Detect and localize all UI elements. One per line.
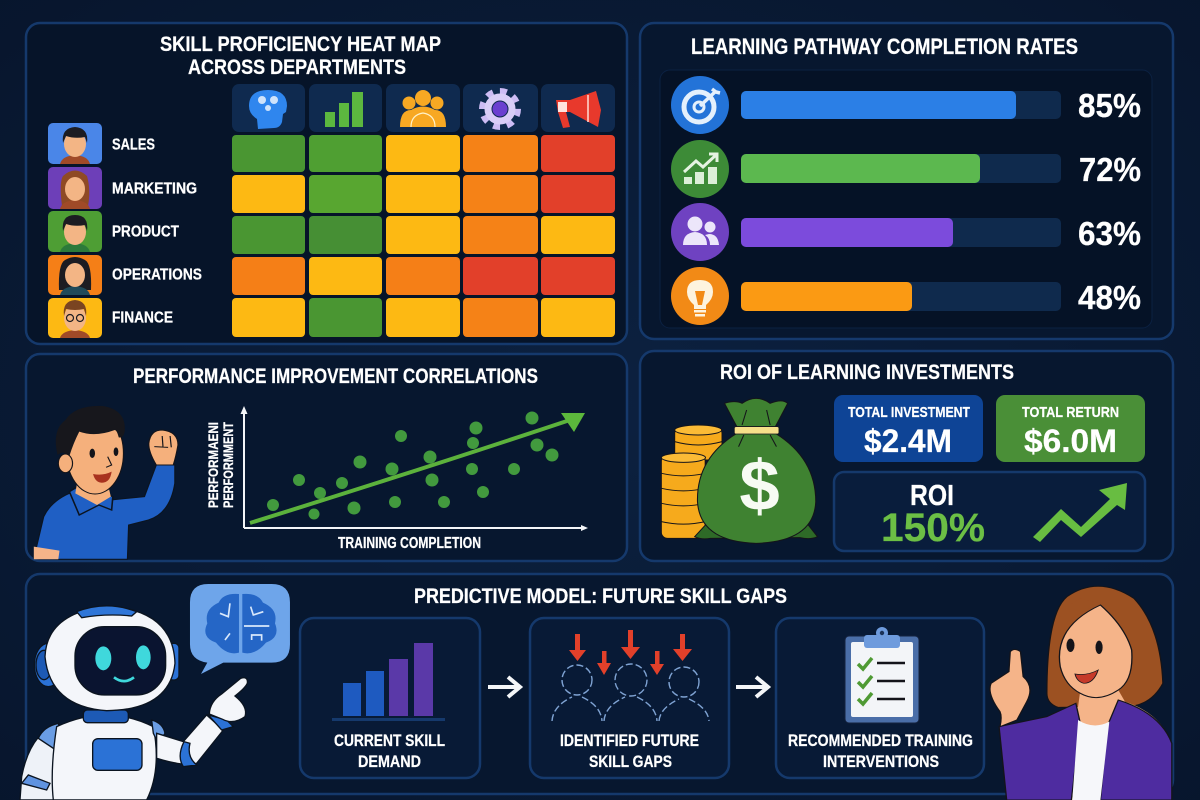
pathway row: idea 48%: [671, 267, 1141, 325]
department: marketing: MARKETING: [112, 180, 197, 198]
icon: light bulb: [671, 267, 729, 325]
department: sales: SALES: [112, 136, 155, 154]
step: recommended training interventions: INTERVENTIONS: [823, 752, 939, 771]
character: robot: [20, 606, 247, 800]
icon: money bag and coins: $: [739, 445, 780, 526]
axes: [240, 406, 588, 531]
step: current skill demand: CURRENT SKILL: [334, 731, 445, 750]
icon: money bag and coins: [661, 398, 818, 543]
heat map grid: [232, 135, 615, 337]
trend arrow: [250, 413, 585, 523]
department: product: PRODUCT: [112, 224, 179, 240]
icon: bars: [325, 92, 363, 127]
icon: people: [400, 90, 446, 127]
icon: rising arrow: [1033, 483, 1127, 542]
speech bubble with brain icon: [190, 584, 290, 674]
icon: clipboard: [845, 627, 919, 723]
step: identified future skill gaps: [530, 618, 729, 778]
metric: roi 150%: [834, 472, 1145, 551]
icon: megaphone: [556, 91, 601, 128]
icon: dashed people with red arrows: [552, 630, 709, 721]
heading: heat map: SKILL PROFICIENCY HEAT MAP: [160, 33, 441, 56]
skill column header icons: [232, 84, 615, 132]
metric: total return: $6.0M: [1024, 423, 1117, 459]
pathway row: growth 72%: [671, 140, 1141, 198]
department: finance: FINANCE: [112, 310, 173, 326]
metric: roi 150%: 150%: [881, 506, 985, 550]
panel: performance improvement correlations: [26, 354, 627, 561]
icon: growth chart: [671, 140, 729, 198]
step: current skill demand: [300, 618, 480, 778]
y axis labels: [205, 422, 236, 508]
y axis labels: PERFORMAENI: [205, 422, 221, 508]
step: identified future skill gaps: SKILL GAPS: [589, 752, 672, 771]
icon: brain head: [249, 90, 287, 129]
heading: roi: ROI OF LEARNING INVESTMENTS: [720, 361, 1014, 384]
panel: predictive model future skill gaps: [20, 574, 1173, 800]
department: operations: OPERATIONS: [112, 266, 202, 284]
character: man raising fist: [34, 406, 178, 559]
y axis labels: PERFORMMENT: [220, 422, 236, 508]
metric: total return: [996, 395, 1145, 462]
step: recommended training interventions: RECOMMENDED TRAINING: [788, 731, 973, 750]
metric: roi 150%: ROI: [910, 480, 954, 512]
panel: roi of learning investments: [640, 351, 1173, 561]
heading: performance: PERFORMANCE IMPROVEMENT CORRELATIONS: [133, 365, 538, 388]
heading: heat map: ACROSS DEPARTMENTS: [188, 56, 406, 79]
metric: total return: TOTAL RETURN: [1022, 404, 1119, 421]
step: current skill demand: DEMAND: [358, 752, 421, 771]
character: woman pointing up: [990, 586, 1172, 800]
heading: pathway: LEARNING PATHWAY COMPLETION RATES: [691, 34, 1078, 59]
department: product: [48, 211, 179, 252]
icon: gear: [482, 91, 518, 127]
pathway row: people 63%: [671, 203, 1141, 261]
panel: skill proficiency heat map: [26, 23, 627, 344]
metric: total investment: [834, 395, 983, 462]
department: sales: [48, 123, 155, 164]
step: identified future skill gaps: IDENTIFIED FUTURE: [560, 731, 699, 750]
icon: target: [671, 76, 729, 134]
icon: people: [671, 203, 729, 261]
department: finance: [48, 298, 173, 338]
metric: total investment: $2.4M: [864, 423, 952, 459]
step: recommended training interventions: [776, 618, 984, 778]
scatter plot: [205, 406, 588, 552]
robot body: [20, 678, 247, 800]
metric: total investment: TOTAL INVESTMENT: [848, 404, 970, 421]
pathway row: people 63%: 63%: [1078, 215, 1141, 252]
department: operations: [48, 255, 202, 295]
heading: heat map: [160, 33, 441, 79]
data points: [267, 412, 558, 520]
pathway row: growth 72%: 72%: [1079, 151, 1141, 188]
pathway row: idea 48%: 48%: [1078, 279, 1141, 316]
pathway row: target 85%: [671, 76, 1141, 134]
arrow: step 1 to 2: [488, 677, 520, 697]
pathway row: target 85%: 85%: [1078, 87, 1141, 124]
heading: predictive model: PREDICTIVE MODEL: FUTURE SKILL GAPS: [414, 585, 787, 608]
chart: demand bars: [332, 643, 445, 721]
department: marketing: [48, 167, 197, 209]
robot head: [34, 606, 179, 711]
x axis label: TRAINING COMPLETION: [338, 535, 481, 552]
arrow: step 2 to 3: [736, 677, 768, 697]
panel: learning pathway completion rates: [640, 23, 1173, 339]
